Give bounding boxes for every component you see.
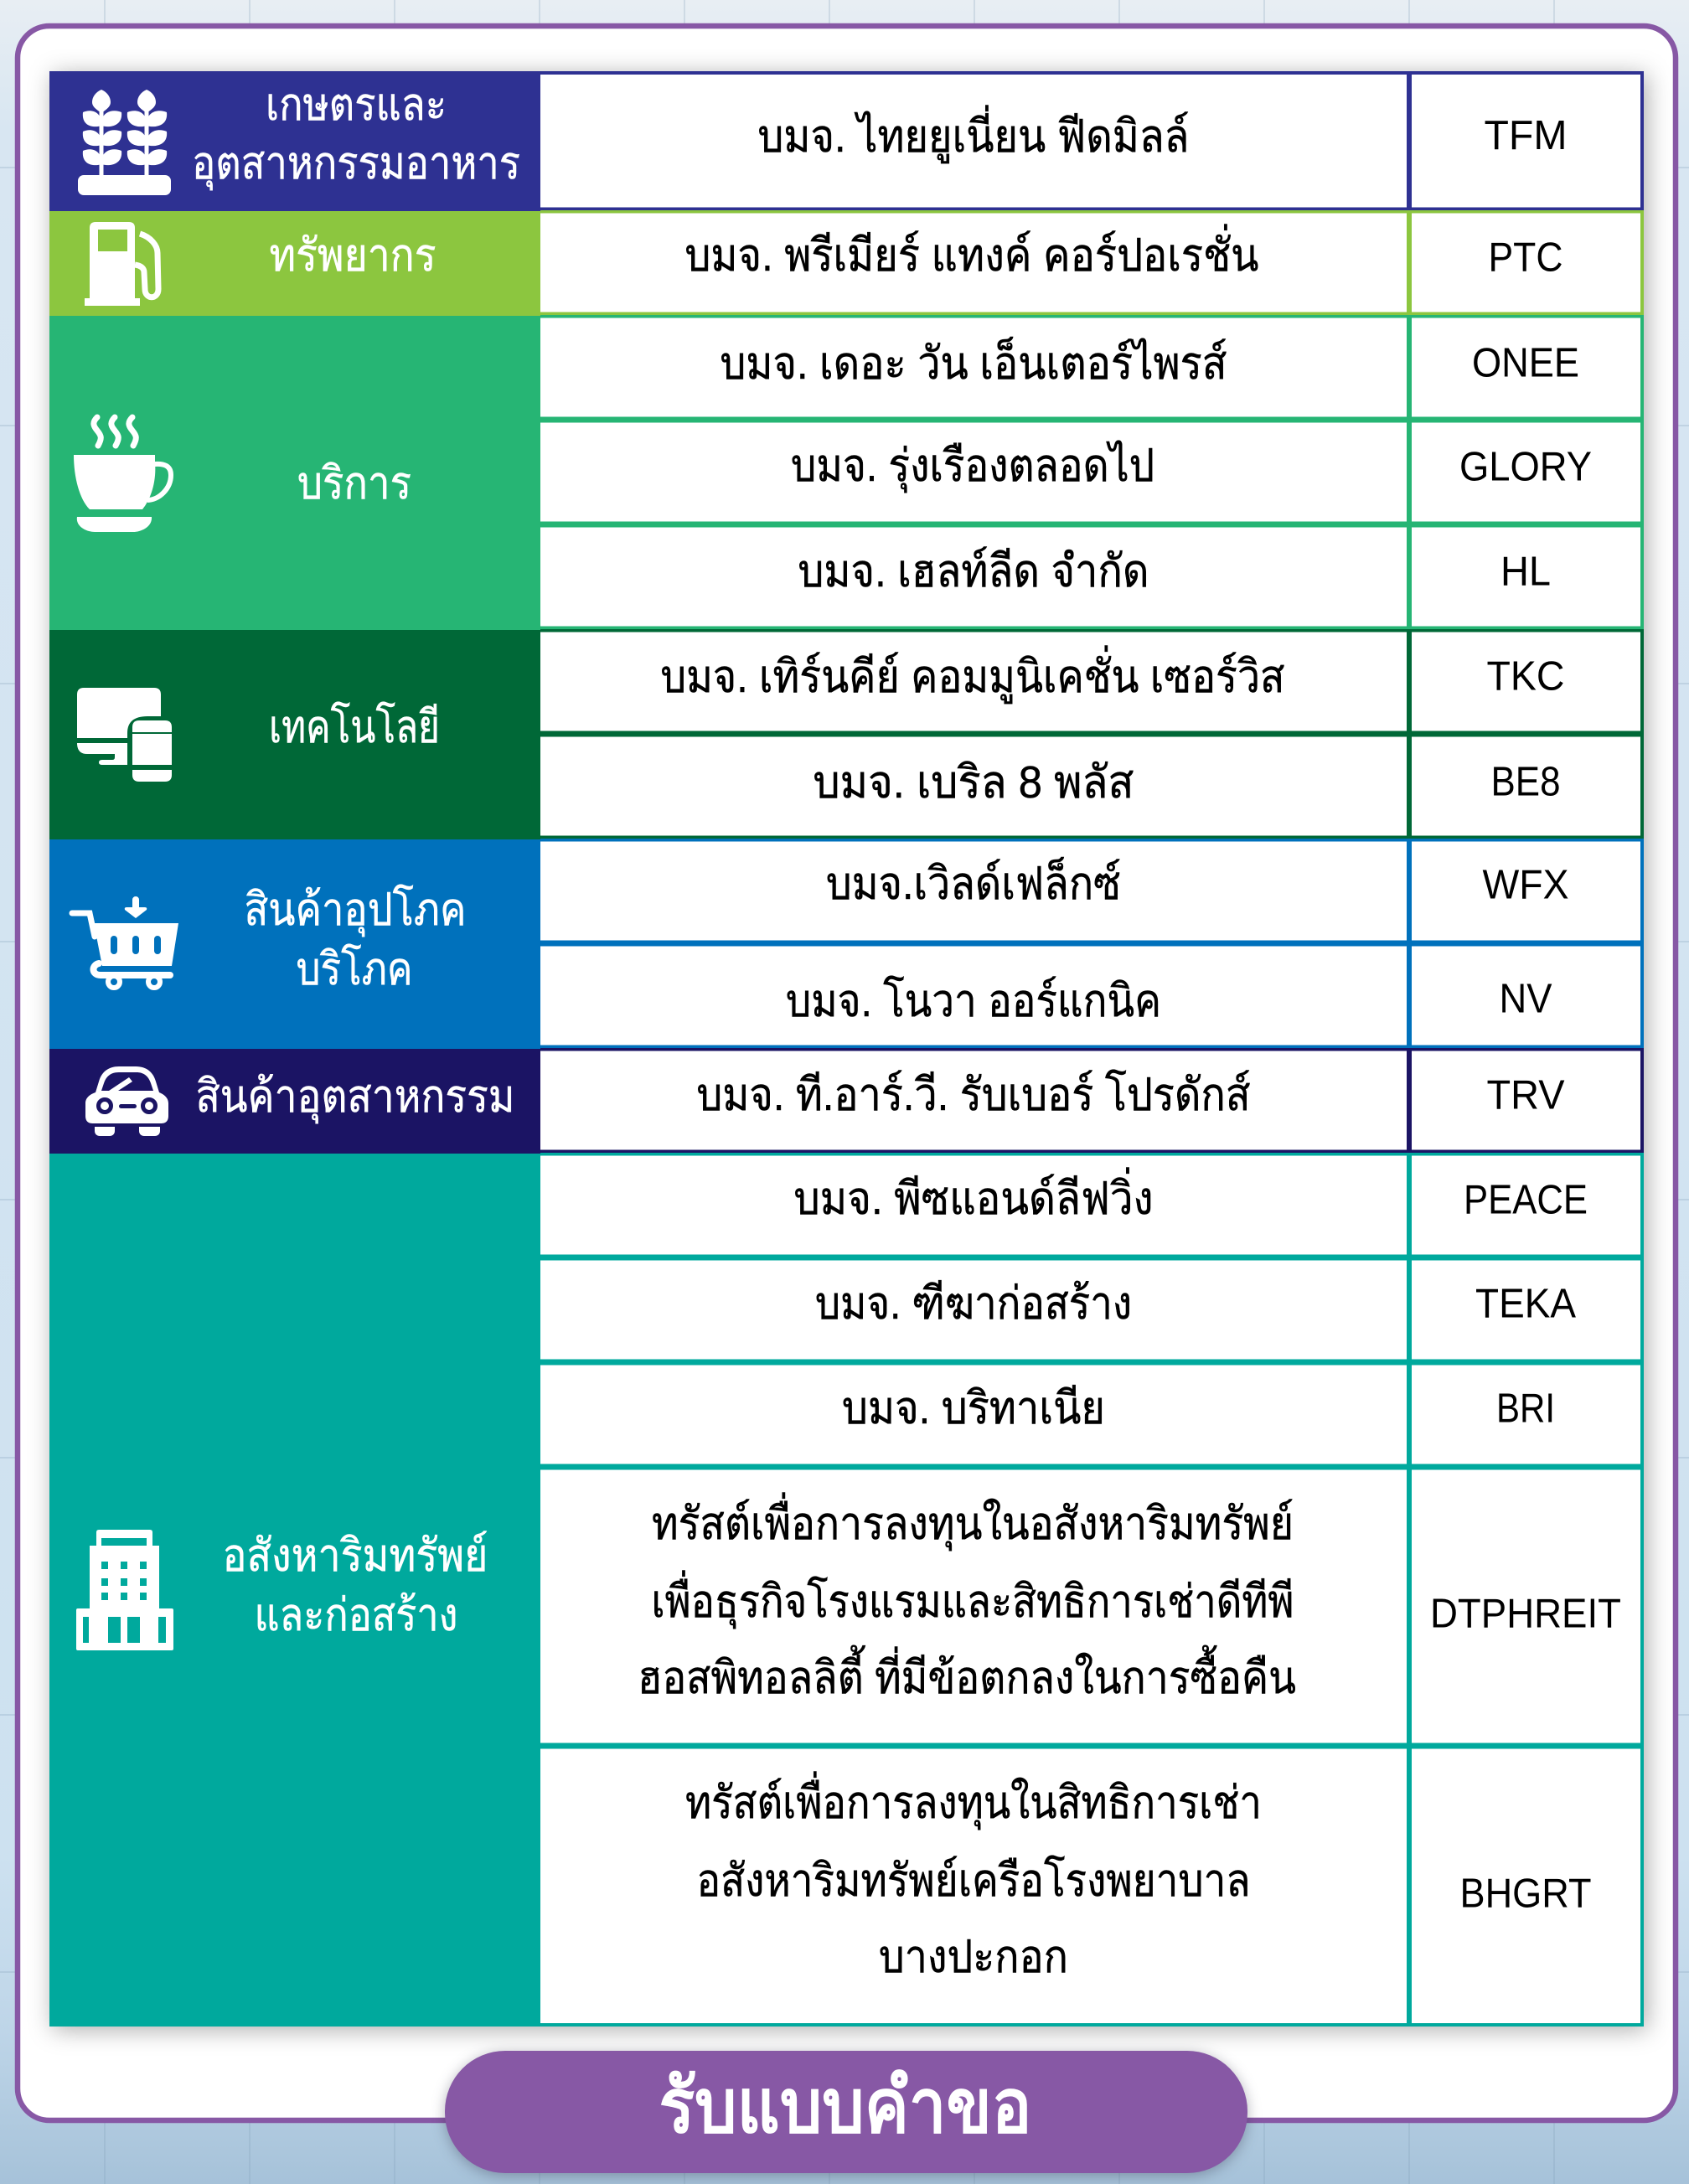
- icon: shopping cart: [72, 896, 178, 988]
- icon: building: [76, 1530, 173, 1650]
- ticker: PEACE: PEACE: [1464, 1178, 1588, 1223]
- category label: property and construction: อสังหาริมทรัพย์: [223, 1531, 488, 1581]
- company: TFM: บมจ. ไทยยูเนี่ยน ฟีดมิลล์: [757, 105, 1190, 163]
- row: PEACE: [540, 1153, 1644, 1257]
- panel: category services: [49, 316, 540, 630]
- company: PTC: บมจ. พรีเมียร์ แทงค์ คอร์ปอเรชั่น: [685, 224, 1258, 281]
- panel: company table rows: [540, 71, 1644, 2027]
- panel: category technology: [49, 630, 540, 839]
- company: BHGRT: ทรัสต์เพื่อการลงทุนในสิทธิการเช่า: [685, 1771, 1262, 1830]
- category label: resources: ทรัพยากร: [270, 230, 436, 281]
- company: DTPHREIT: เพื่อธุรกิจโรงแรมและสิทธิการเช่าดีทีพี: [652, 1570, 1294, 1629]
- ticker: TKC: TKC: [1486, 653, 1565, 699]
- company: TEKA: บมจ. ฑีฆาก่อสร้าง: [815, 1278, 1132, 1329]
- company: BHGRT: อสังหาริมทรัพย์เครือโรงพยาบาล: [697, 1855, 1250, 1906]
- company: BHGRT: บางปะกอก: [879, 1932, 1068, 1982]
- ticker: PTC: PTC: [1488, 235, 1563, 280]
- company: NV: บมจ. โนวา ออร์แกนิค: [786, 975, 1161, 1026]
- panel: category industrials: [49, 1049, 540, 1154]
- company: ONEE: บมจ. เดอะ วัน เอ็นเตอร์ไพรส์: [721, 337, 1227, 389]
- company: GLORY: บมจ. รุ่งเรืองตลอดไป: [791, 440, 1154, 493]
- category label: agriculture: [192, 80, 520, 191]
- company: TRV: บมจ. ที.อาร์.วี. รับเบอร์ โปรดักส์: [697, 1069, 1250, 1120]
- icon: wheat plants: [78, 90, 171, 195]
- row: TFM: [540, 71, 1644, 210]
- category label: agriculture: เกษตรและ: [266, 80, 447, 130]
- row: BE8: [540, 734, 1644, 839]
- ticker: TRV: TRV: [1486, 1072, 1565, 1118]
- icon: coffee cup: [74, 417, 171, 532]
- row: PTC: [540, 210, 1644, 315]
- row: BHGRT: [540, 1746, 1644, 2027]
- ticker: DTPHREIT: DTPHREIT: [1430, 1592, 1621, 1637]
- row: HL: [540, 524, 1644, 629]
- category label: agriculture: อุตสาหกรรมอาหาร: [192, 138, 520, 191]
- panel: category property and construction: [49, 1154, 540, 2027]
- ticker: BRI: BRI: [1496, 1386, 1555, 1431]
- ticker: ONEE: ONEE: [1472, 340, 1579, 385]
- category label: consumer products: บริโภค: [297, 943, 412, 994]
- company: PEACE: บมจ. พีซแอนด์ลีฟวิ่ง: [794, 1167, 1153, 1224]
- company: DTPHREIT: [638, 1492, 1296, 1703]
- icon: fuel pump: [85, 222, 158, 306]
- ticker: HL: HL: [1500, 550, 1551, 595]
- ticker: GLORY: GLORY: [1459, 444, 1592, 489]
- row: TEKA: [540, 1257, 1644, 1362]
- row: GLORY: [540, 420, 1644, 524]
- company: BRI: บมจ. บริทาเนีย: [842, 1383, 1105, 1433]
- company: BE8: บมจ. เบริล 8 พลัส: [813, 757, 1134, 808]
- row: BRI: [540, 1362, 1644, 1467]
- category label: industrials: สินค้าอุตสาหกรรม: [196, 1071, 514, 1124]
- category label: services: บริการ: [297, 458, 411, 509]
- category label: property and construction: [223, 1531, 488, 1640]
- icon: monitor and phone: [77, 688, 172, 782]
- ticker: WFX: WFX: [1483, 863, 1568, 908]
- panel: category consumer products: [49, 839, 540, 1049]
- company: TKC: บมจ. เทิร์นคีย์ คอมมูนิเคชั่น เซอร์วิส: [660, 645, 1285, 704]
- panel: category agriculture: [49, 71, 540, 211]
- company: WFX: บมจ.เวิลด์เฟล็กซ์: [826, 857, 1121, 909]
- company: BHGRT: [685, 1771, 1262, 1982]
- button: request form: [445, 2051, 1247, 2173]
- category label: property and construction: และก่อสร้าง: [255, 1590, 457, 1640]
- ticker: TEKA: TEKA: [1475, 1282, 1576, 1327]
- icon: car: [85, 1066, 168, 1136]
- company: HL: บมจ. เฮลท์ลีด จำกัด: [798, 546, 1149, 596]
- row: ONEE: [540, 315, 1644, 420]
- row: NV: [540, 943, 1644, 1048]
- button label: รับแบบคำขอ: [659, 2065, 1032, 2149]
- company: DTPHREIT: ฮอสพิทอลลิตี้ ที่มีข้อตกลงในการซื้อคืน: [638, 1645, 1296, 1703]
- row: DTPHREIT: [540, 1467, 1644, 1746]
- row: TKC: [540, 629, 1644, 734]
- ticker: BHGRT: BHGRT: [1459, 1872, 1592, 1917]
- ticker: NV: NV: [1500, 977, 1552, 1022]
- category label: technology: เทคโนโลยี: [269, 701, 440, 752]
- row: TRV: [540, 1048, 1644, 1153]
- company: DTPHREIT: ทรัสต์เพื่อการลงทุนในอสังหาริมทรัพย์: [652, 1492, 1294, 1552]
- category label: consumer products: [245, 884, 466, 994]
- category label: consumer products: สินค้าอุปโภค: [245, 884, 466, 937]
- ticker: TFM: TFM: [1485, 113, 1567, 158]
- ticker: BE8: BE8: [1491, 759, 1560, 804]
- panel: category resources: [49, 211, 540, 316]
- row: WFX: [540, 839, 1644, 943]
